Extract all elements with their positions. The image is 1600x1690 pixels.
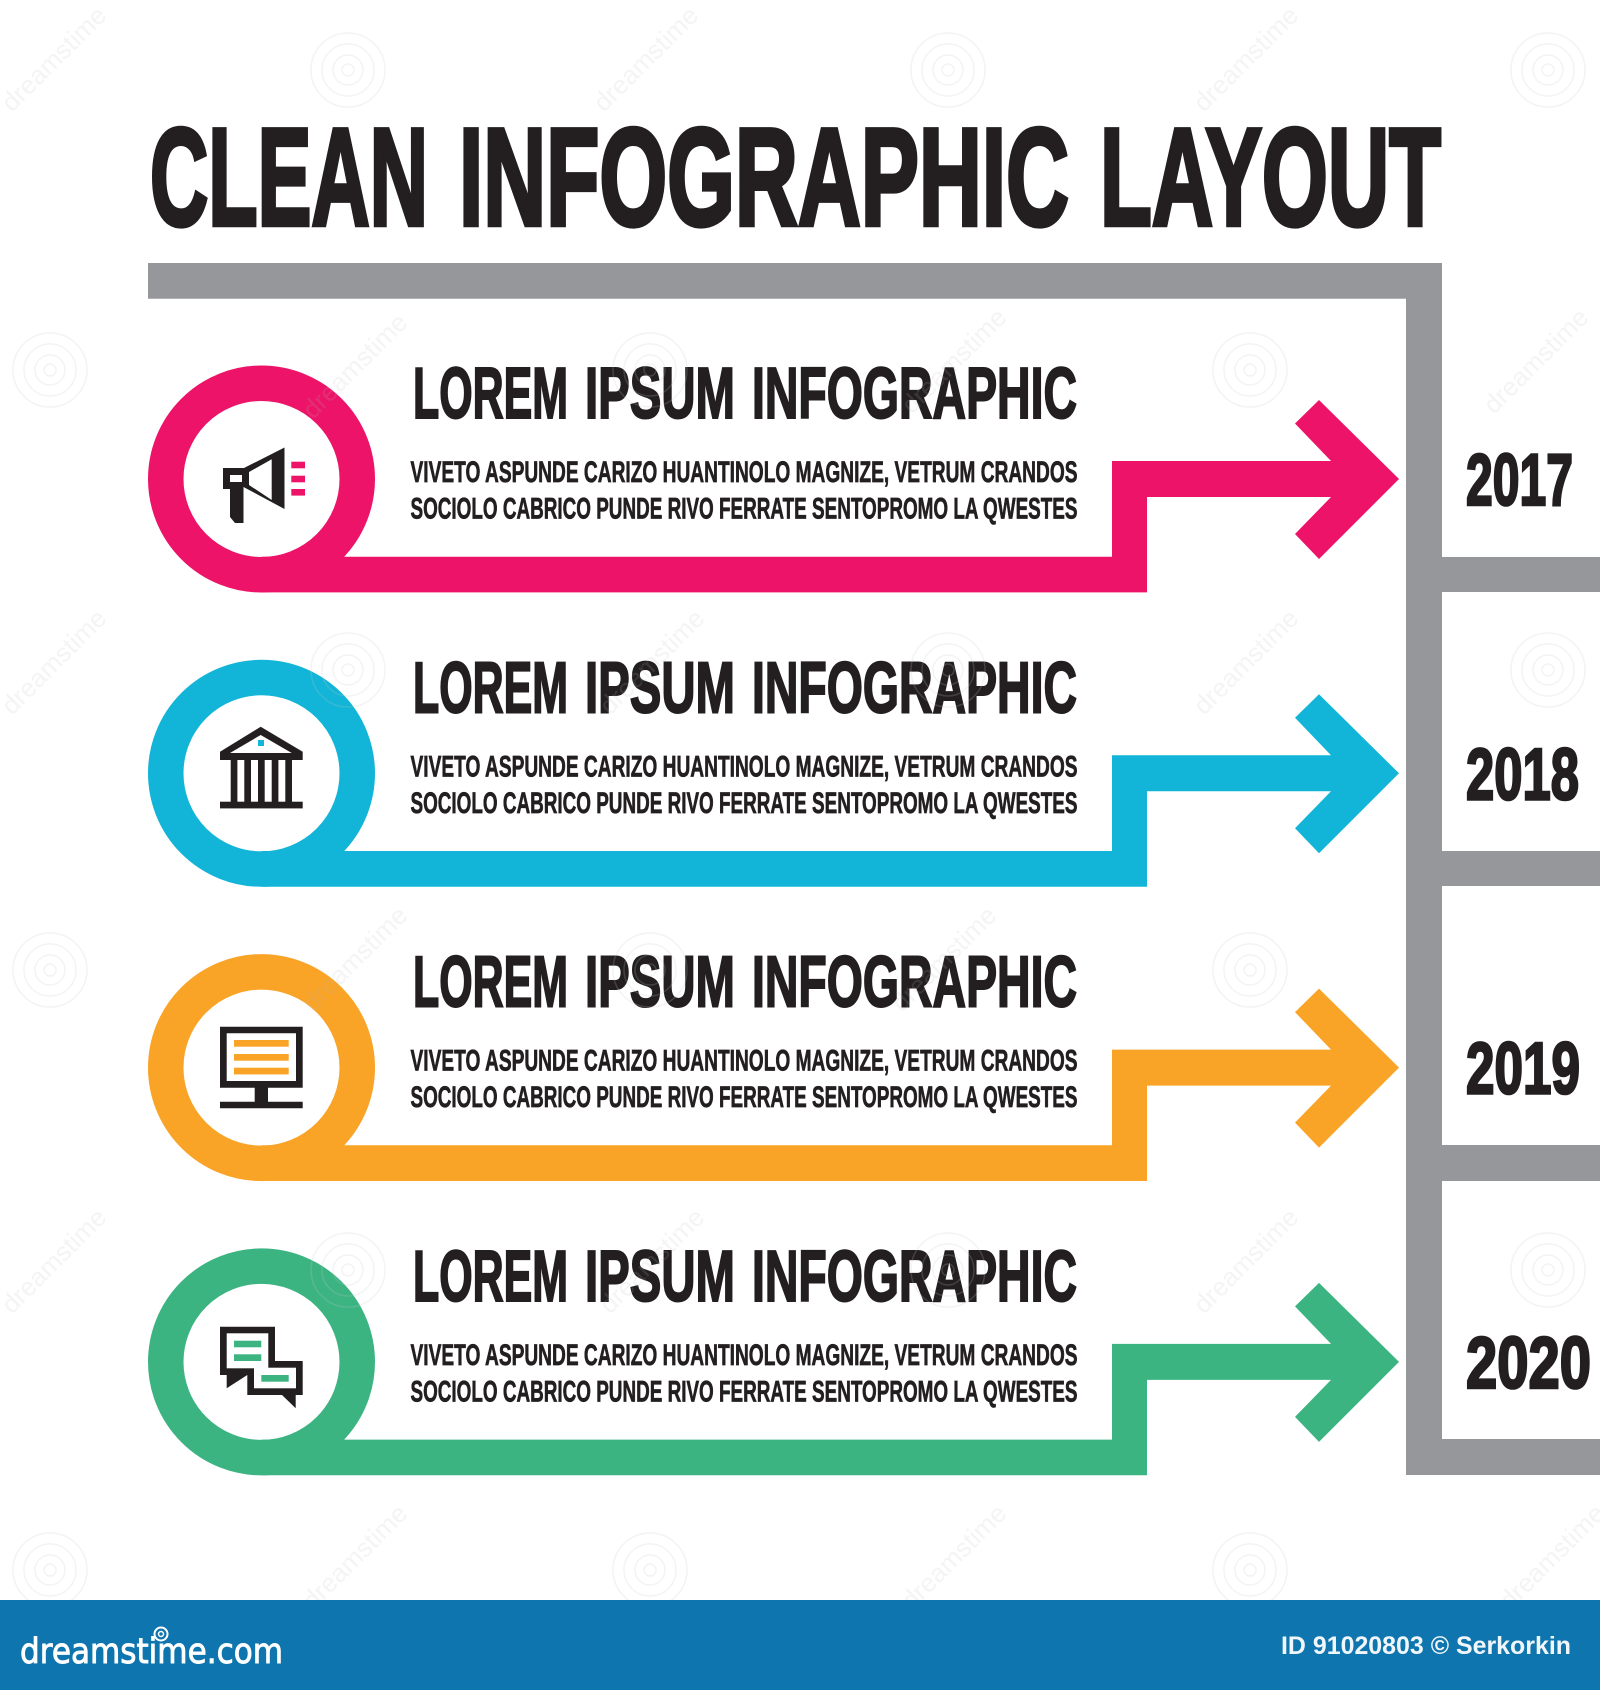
icon: megaphone — [223, 448, 305, 523]
circle ring blue — [166, 678, 357, 869]
heading: IPSUM — [585, 648, 735, 728]
text block: VIVETO ASPUNDE CARIZO HUANTINOLO MAGNIZE, VETRUM CRANDOS — [410, 750, 1078, 783]
panel: row 2020 — [166, 1237, 1591, 1475]
footer credit: ID 91020803 © Serkorkin — [1281, 1632, 1571, 1660]
text block: VIVETO ASPUNDE CARIZO HUANTINOLO MAGNIZE, VETRUM CRANDOS — [410, 456, 1078, 489]
watermark text: dreamstime — [296, 307, 413, 424]
footer bar — [0, 1600, 1600, 1690]
text block — [410, 750, 1078, 820]
heading — [413, 1237, 1077, 1317]
heading: INFOGRAPHIC — [752, 943, 1077, 1023]
heading: LOREM — [413, 943, 568, 1023]
watermark text: dreamstime — [593, 603, 710, 720]
title: INFOGRAPHIC — [459, 100, 1069, 255]
heading — [413, 354, 1077, 434]
panel: row 2017 — [166, 354, 1573, 592]
arrow blue — [262, 694, 1399, 887]
timeline frame: grey bars — [148, 263, 1600, 1475]
panel: row 2019 — [166, 943, 1580, 1181]
heading: IPSUM — [585, 943, 735, 1023]
text block: SOCIOLO CABRICO PUNDE RIVO FERRATE SENTOPROMO LA QWESTES — [410, 492, 1078, 526]
heading: LOREM — [413, 648, 568, 728]
footer logo: dreamstime.com: dreamstime.com — [20, 1632, 283, 1672]
text block: SOCIOLO CABRICO PUNDE RIVO FERRATE SENTOPROMO LA QWESTES — [410, 1375, 1078, 1408]
icon: bank building — [220, 727, 303, 808]
arrow orange — [262, 989, 1399, 1181]
text block — [410, 456, 1078, 526]
heading — [413, 943, 1077, 1023]
circle ring pink — [166, 383, 357, 575]
watermark text: dreamstime — [895, 1498, 1012, 1615]
icon: chat bubbles — [220, 1327, 303, 1408]
heading: INFOGRAPHIC — [752, 354, 1077, 434]
watermark text: dreamstime — [1187, 0, 1304, 117]
text block: VIVETO ASPUNDE CARIZO HUANTINOLO MAGNIZE, VETRUM CRANDOS — [410, 1339, 1078, 1372]
title: CLEAN — [150, 100, 428, 255]
heading: IPSUM — [585, 1237, 735, 1317]
text block — [410, 1339, 1078, 1408]
arrow pink — [262, 400, 1399, 592]
panel: row 2018 — [166, 648, 1579, 887]
heading: INFOGRAPHIC — [752, 1237, 1077, 1317]
arrow green — [262, 1283, 1399, 1475]
watermark text: dreamstime — [1187, 1202, 1304, 1319]
heading — [413, 648, 1077, 728]
watermark text: dreamstime — [296, 900, 413, 1017]
watermark text: dreamstime — [895, 302, 1012, 419]
icon: monitor — [220, 1027, 303, 1108]
watermark text: dreamstime — [1477, 302, 1594, 419]
circle ring green — [166, 1266, 357, 1458]
circle ring orange — [166, 972, 357, 1163]
watermark text: dreamstime — [885, 900, 1002, 1017]
watermark text: dreamstime — [296, 1498, 413, 1615]
text block — [410, 1045, 1078, 1114]
watermark text: dreamstime — [587, 0, 704, 117]
heading: LOREM — [413, 1237, 568, 1317]
heading: LOREM — [413, 354, 568, 434]
text block: SOCIOLO CABRICO PUNDE RIVO FERRATE SENTOPROMO LA QWESTES — [410, 1081, 1078, 1114]
watermark text: dreamstime — [593, 1202, 710, 1319]
heading: IPSUM — [585, 354, 735, 434]
text block: VIVETO ASPUNDE CARIZO HUANTINOLO MAGNIZE, VETRUM CRANDOS — [410, 1045, 1078, 1078]
watermark text: dreamstime — [1187, 603, 1304, 720]
text block: SOCIOLO CABRICO PUNDE RIVO FERRATE SENTOPROMO LA QWESTES — [410, 787, 1078, 820]
heading: INFOGRAPHIC — [752, 648, 1077, 728]
